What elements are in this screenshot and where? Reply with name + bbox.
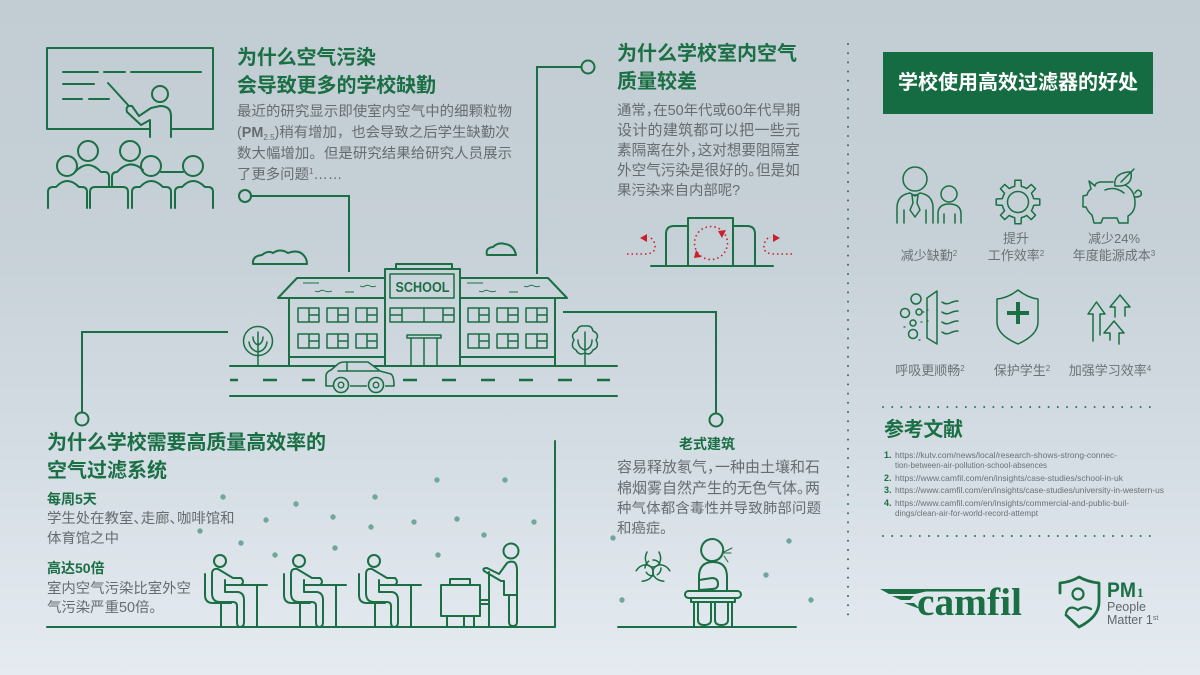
list: references: 3. — [884, 485, 892, 495]
label: productivity — [988, 231, 1045, 263]
school — [278, 264, 567, 366]
car — [326, 362, 394, 392]
list: references: 4. — [884, 498, 892, 508]
school: SCHOOL — [396, 280, 450, 296]
text block: 5 days a week: 每周5天 — [47, 491, 97, 507]
text block: radon and asbestos: 容易释放氡气，一种由土壤和石 — [617, 458, 820, 476]
label: learning efficiency: 4 — [1147, 364, 1152, 373]
label: energy cost: 3 — [1151, 249, 1156, 258]
tree right — [572, 326, 597, 366]
text block: old building design: 通常，在50年代或60年代早期 — [617, 102, 800, 119]
label: energy cost — [1073, 231, 1156, 263]
icon: shield with plus — [997, 290, 1038, 344]
text block: up to 50 times — [47, 560, 191, 616]
student 1 — [205, 555, 267, 627]
text block: 5 days a week — [47, 491, 235, 547]
connector: absences to school — [239, 190, 349, 272]
label: productivity: 工作效率 — [988, 248, 1040, 263]
label: protect students: 2 — [1046, 364, 1051, 373]
icon: rising arrows — [1088, 295, 1130, 344]
list: references — [884, 450, 1164, 518]
icon: fewer absences — [897, 167, 961, 223]
text block: old building design: 设计的建筑都可以把一些元 — [617, 122, 800, 139]
text block: up to 50 times: 高达50倍 — [47, 560, 105, 576]
connector: school to filtration section — [76, 332, 228, 426]
label: easier breathing: 2 — [960, 364, 965, 373]
text block: absences — [237, 103, 512, 183]
text block: absences: 了更多问题 — [237, 167, 309, 183]
logo: PM1 People Matter 1st: People — [1107, 600, 1146, 614]
text block: 5 days a week: 学生处在教室、走廊、咖啡馆和 — [47, 510, 235, 527]
text block: absences: …… — [313, 167, 342, 183]
label: productivity: 提升 — [1003, 231, 1029, 246]
heading: why indoor air quality is poor — [617, 41, 797, 93]
label: easier breathing: 呼吸更顺畅 — [895, 363, 960, 378]
text block: 5 days a week: 体育馆之中 — [47, 530, 119, 547]
text block: up to 50 times: 室内空气污染比室外空 — [47, 580, 191, 597]
label: energy cost: 年度能源成本 — [1073, 248, 1151, 263]
connector: school to old buildings — [563, 312, 722, 426]
text block: absences: )稍有增加，也会导致之后学生缺勤次 — [275, 124, 510, 141]
list: references: https://www.camfil.com/en/insights/case-studies/university-in-western-us — [895, 485, 1164, 495]
connector: indoor quality to school — [537, 60, 594, 274]
illustration: school building and road — [230, 243, 617, 396]
text block: radon and asbestos: 棉烟雾自然产生的无色气体。两 — [617, 480, 820, 497]
clouds — [253, 250, 307, 264]
label: energy cost: 减少24% — [1088, 231, 1140, 246]
student 2 — [284, 555, 346, 627]
list: references: 1. — [884, 450, 892, 460]
icon: teacher at board with students — [47, 48, 213, 208]
text block: old building design: 果污染来自内部呢? — [617, 182, 740, 199]
heading: old buildings: 老式建筑 — [679, 436, 735, 452]
text block: absences: 最近的研究显示即使室内空气中的细颗粒物 — [237, 103, 512, 120]
heading: why pollution causes absences — [237, 46, 436, 97]
text block: absences: 数大幅增加。但是研究结果给研究人员展示 — [237, 145, 512, 162]
label: protect students: 保护学生 — [994, 363, 1046, 378]
banner: benefits of high efficiency filters — [883, 52, 1153, 114]
text block: old building design: 素隔离在外，这对想要阻隔室 — [617, 142, 800, 159]
icon: sealed building with trapped air — [627, 218, 792, 266]
student 3 — [359, 555, 421, 627]
illustration: coughing student and biohazard — [610, 535, 814, 627]
list: references: https://www.camfil.com/en/insights/commercial-and-public-buil- — [895, 498, 1129, 508]
text block: up to 50 times: 气污染严重50倍。 — [47, 599, 164, 616]
heading: why indoor air quality is poor: 为什么学校室内空气 — [617, 41, 797, 65]
road — [230, 366, 617, 396]
heading: why indoor air quality is poor: 质量较差 — [617, 69, 697, 93]
text block: radon and asbestos: 种气体都含毒性并导致肺部问题 — [617, 500, 821, 517]
logo: PM1 People Matter 1st: Matter 1 — [1107, 613, 1153, 627]
list: references: tion-between-air-pollution-school-absences — [895, 460, 1047, 470]
text block: absences: 2.5 — [263, 133, 275, 142]
logo: PM1 People Matter 1st — [1060, 577, 1158, 627]
list: references: 2. — [884, 473, 892, 483]
icon: gear — [996, 180, 1040, 224]
label: fewer absences: 2 — [953, 249, 958, 258]
particles — [197, 477, 537, 558]
logo: PM1 People Matter 1st: 1 — [1137, 585, 1144, 600]
banner: benefits of high efficiency filters: 学校使用高效过滤器的好处 — [898, 70, 1138, 94]
icon: piggy bank with leaf — [1083, 169, 1141, 223]
logo: camfil: camfil — [917, 581, 1022, 624]
teacher and desk — [441, 544, 518, 627]
divider: vertical dotted — [847, 44, 849, 620]
text block: absences: (PM — [237, 125, 263, 141]
tree left — [244, 326, 272, 366]
heading: why schools need filtration: 为什么学校需要高质量高效率的 — [47, 430, 326, 454]
text block: radon and asbestos — [617, 458, 821, 537]
heading: why schools need filtration — [47, 430, 326, 482]
icon: easier breathing — [900, 291, 958, 344]
list: references: https://www.camfil.com/en/insights/case-studies/school-in-uk — [895, 473, 1124, 483]
list: references: https://kutv.com/news/local/research-shows-strong-connec- — [895, 450, 1117, 460]
heading: why pollution causes absences: 会导致更多的学校缺勤 — [237, 73, 436, 97]
text block: radon and asbestos: 和癌症。 — [617, 520, 675, 537]
divider: horizontal dotted — [883, 407, 1155, 536]
icon: coughing student — [685, 539, 741, 627]
text block: old building design — [617, 102, 800, 199]
logo: PM1 People Matter 1st: PM — [1107, 579, 1136, 602]
label: fewer absences: 减少缺勤 — [901, 248, 953, 263]
heading: why schools need filtration: 空气过滤系统 — [47, 458, 167, 482]
heading: why pollution causes absences: 为什么空气污染 — [237, 46, 376, 69]
illustration: classroom with pollutant particles — [47, 441, 555, 627]
heading: references: 参考文献 — [884, 417, 963, 441]
logo: PM1 People Matter 1st: st — [1153, 615, 1158, 622]
text block: absences: 1 — [309, 167, 314, 176]
label: productivity: 2 — [1040, 249, 1045, 258]
text block: old building design: 外空气污染是很好的。但是如 — [617, 162, 800, 179]
label: learning efficiency: 加强学习效率 — [1069, 363, 1147, 378]
icon: biohazard — [635, 552, 671, 583]
list: references: dings/clean-air-for-world-record-attempt — [895, 508, 1039, 518]
